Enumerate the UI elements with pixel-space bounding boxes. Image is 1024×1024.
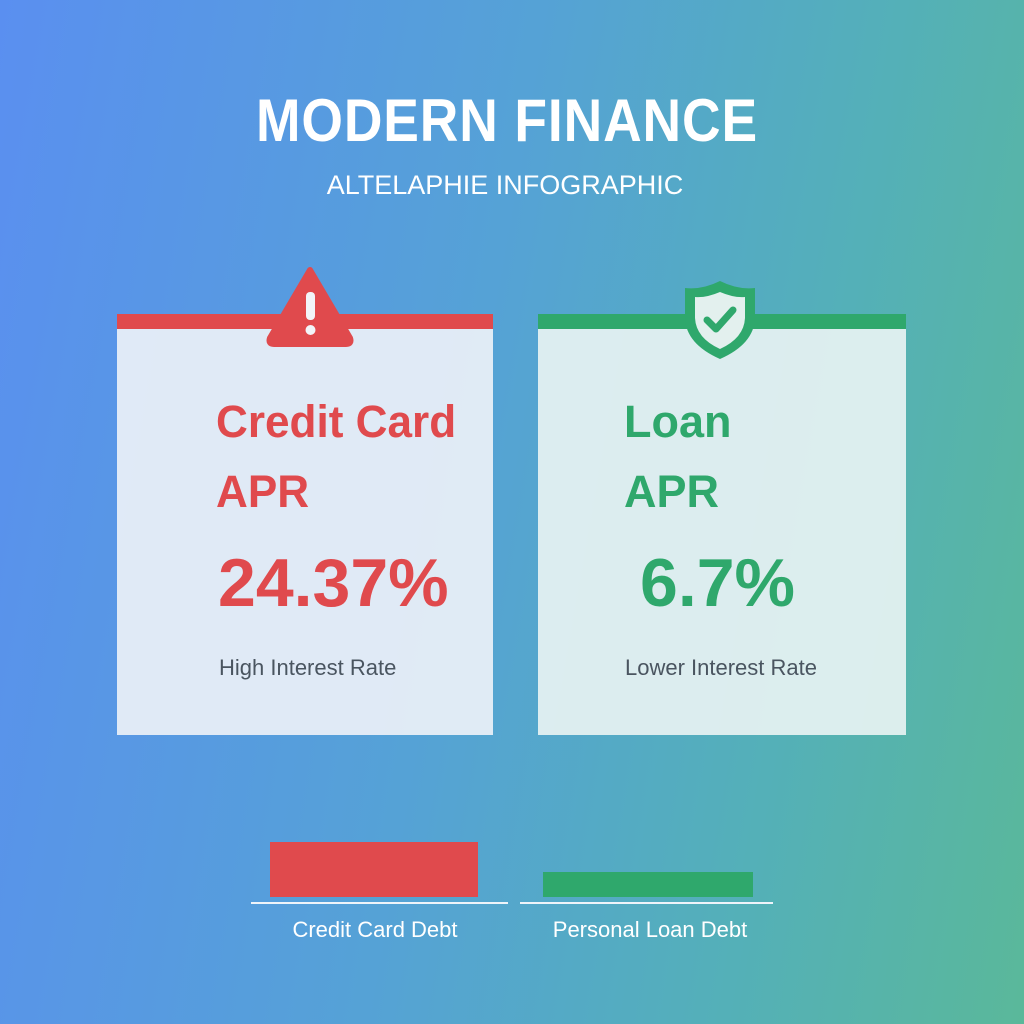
bar chart: [251, 842, 773, 942]
bar: credit card debt: [270, 842, 478, 897]
heading: credit card apr: Credit Card: [216, 396, 456, 447]
label: personal loan debt: Personal Loan Debt: [553, 917, 747, 942]
heading: loan apr: [624, 396, 732, 517]
panel: loan: [538, 314, 906, 735]
heading: loan apr: APR: [624, 466, 719, 517]
value: 24.37%: 24.37%: [218, 545, 449, 621]
icon: warning triangle: [266, 267, 354, 347]
caption: Lower Interest Rate: [625, 655, 817, 680]
title: MODERN FINANCE: [256, 87, 758, 154]
heading: loan apr: Loan: [624, 396, 732, 447]
panel: credit card: [117, 314, 493, 735]
label: credit card debt: Credit Card Debt: [292, 917, 458, 942]
heading: credit card apr: [216, 396, 456, 517]
subtitle: ALTELAPHIE INFOGRAPHIC: [327, 170, 683, 200]
icon: shield check: [685, 281, 755, 359]
caption: High Interest Rate: [219, 655, 396, 680]
bar: personal loan debt: [543, 872, 753, 897]
heading: credit card apr: APR: [216, 466, 309, 517]
value: 6.7%: 6.7%: [640, 545, 795, 621]
